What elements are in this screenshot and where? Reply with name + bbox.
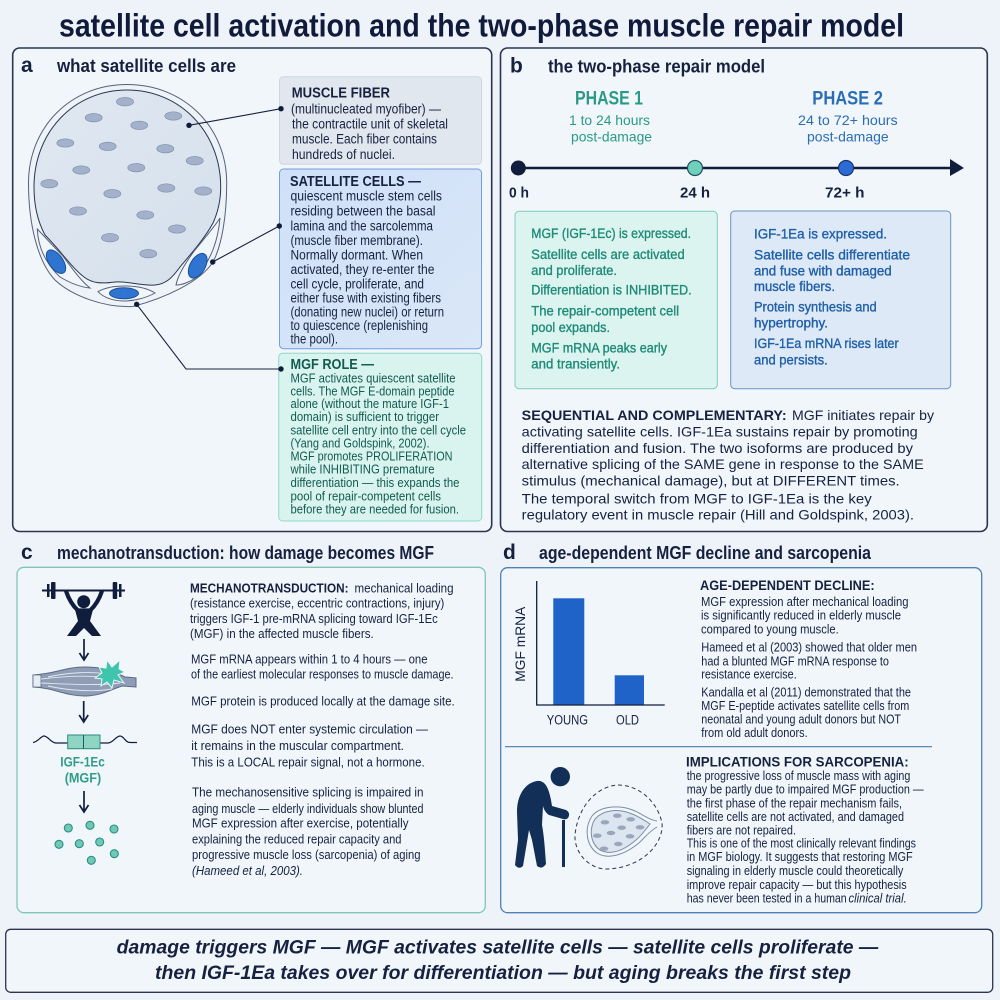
age-dependent decline text: MGF E-peptide activates satellite cells from (701, 698, 909, 713)
age-dependent decline text (700, 577, 917, 740)
callout: satellite cells: quiescent muscle stem cells (290, 189, 442, 204)
callout: muscle fiber: MUSCLE FIBER (292, 85, 390, 101)
callout: MGF role: differentiation — this expands the (290, 475, 460, 490)
sequential and complementary text: regulatory event in muscle repair (Hill and Goldspink, 2003). (522, 507, 914, 522)
callout: MGF role: MGF promotes PROLIFERATION (290, 449, 452, 464)
mechanotransduction text: This is a LOCAL repair signal, not a hormone. (191, 754, 425, 769)
implications for sarcopenia text: This is one of the most clinically relevant findings (687, 836, 916, 851)
phase 2 box: Satellite cells differentiate (754, 247, 910, 262)
age-dependent decline text: MGF expression after mechanical loading (701, 594, 908, 609)
mechanotransduction text: aging muscle — elderly individuals show blunted (192, 801, 424, 816)
phase 2 label: post-damage (807, 129, 889, 145)
callout: satellite cells: (donating new nuclei) or return (290, 304, 444, 319)
phase 1 box: Satellite cells are activated (531, 247, 685, 262)
implications for sarcopenia text: the first phase of the repair mechanism fails, (687, 795, 902, 810)
mechanotransduction text: MGF protein is produced locally at the damage site. (191, 694, 455, 709)
panel d heading: age-dependent MGF decline and sarcopenia (539, 543, 872, 563)
sequential and complementary text (522, 408, 934, 522)
phase 2 box: IGF-1Ea is expressed. (754, 226, 887, 241)
panel b heading: the two-phase repair model (548, 56, 765, 76)
phase 1 box: and proliferate. (531, 263, 617, 278)
nuclei (41, 98, 212, 258)
phase 2 box: and fuse with damaged (754, 263, 892, 278)
muscle fiber cross-section diagram (28, 84, 227, 307)
mechanotransduction text: MGF mRNA appears within 1 to 4 hours — one (191, 651, 428, 666)
callout: satellite cells: activated, they re-enter the (290, 262, 434, 277)
panel: c, mechanotransduction (17, 567, 485, 913)
timeline: 0 h (509, 184, 529, 201)
phase 2 box: Protein synthesis and (754, 299, 877, 314)
implications for sarcopenia text: the progressive loss of muscle mass with aging (687, 768, 910, 783)
arrow (80, 791, 88, 812)
phase 1 label: PHASE 1 (575, 89, 643, 110)
callout: MGF role: pool of repair-competent cells (290, 488, 441, 503)
icon: weightlifter (42, 582, 125, 636)
phase 1 label: 1 to 24 hours (569, 112, 650, 128)
mechanotransduction text: MGF does NOT enter systemic circulation — (191, 721, 428, 736)
age-dependent decline text: compared to young muscle. (701, 622, 839, 637)
callout: satellite cells: SATELLITE CELLS — (290, 174, 421, 190)
callout: muscle fiber: the contractile unit of skeletal (292, 116, 448, 131)
callout: MGF role (279, 353, 482, 521)
mechanotransduction text: progressive muscle loss (sarcopenia) of aging (192, 847, 420, 862)
callout: MGF role: before they are needed for fusion. (290, 502, 459, 517)
bar chart: MGF mRNA young vs old: OLD (616, 712, 639, 727)
callout: satellite cells: (muscle fiber membrane). (290, 233, 423, 248)
phase 1 label (569, 89, 652, 145)
callout: muscle fiber (280, 77, 482, 164)
icon: muscle fiber in dashed circle (575, 785, 662, 869)
age-dependent decline text: resistance exercise. (701, 667, 797, 682)
bar chart: MGF mRNA young vs old (513, 581, 665, 727)
bottom summary banner: damage triggers MGF — MGF activates satellite cells — satellite cells proliferate — (117, 937, 879, 958)
timeline: 72+ h (825, 184, 864, 201)
age-dependent decline text: AGE-DEPENDENT DECLINE: (700, 577, 875, 593)
sequential and complementary text: differentiation and fusion. The two isoforms are produced by (522, 441, 913, 456)
phase 1 box: and transiently. (531, 356, 620, 371)
icon: elderly person with cane (515, 767, 570, 868)
implications for sarcopenia text: fibers are not repaired. (687, 822, 796, 837)
icon: MGF peptide dots (55, 821, 118, 864)
phase 1 box: MGF mRNA peaks early (531, 340, 667, 355)
arrow (80, 639, 88, 660)
phase 2 box: hypertrophy. (754, 315, 828, 330)
phase 2 label (798, 89, 898, 145)
age-dependent decline text: is significantly reduced in elderly muscle (701, 608, 901, 623)
implications for sarcopenia text: IMPLICATIONS FOR SARCOPENIA: (686, 753, 909, 769)
implications for sarcopenia text: clinical trial. (848, 890, 907, 905)
mechanotransduction text: MGF expression after exercise, potentially (192, 816, 409, 831)
callout: satellite cells: either fuse with existing fibers (290, 291, 441, 306)
callout: muscle fiber: (multinucleated myofiber) — (291, 101, 441, 116)
callout: satellite cells: residing between the basal (290, 204, 436, 219)
phase 1 box: MGF (IGF-1Ec) is expressed. (531, 226, 691, 241)
sequential and complementary text: alternative splicing of the SAME gene in response to the SAME (522, 457, 924, 472)
implications for sarcopenia text: has never been tested in a human (687, 890, 847, 905)
mechanotransduction text: (MGF) in the affected muscle fibers. (190, 626, 374, 641)
sequential and complementary text: stimulus (mechanical damage), but at DIFFERENT times. (522, 474, 900, 489)
panel c letter: c (21, 541, 33, 564)
mechanotransduction text: (Hameed et al, 2003). (192, 863, 303, 878)
panel a letter: a (21, 54, 33, 77)
sequential and complementary text: MGF initiates repair by (792, 408, 934, 423)
age-dependent decline text: had a blunted MGF mRNA response to (701, 653, 889, 668)
bottom summary banner: then IGF-1Ea takes over for differentiation — but aging breaks the first step (155, 963, 851, 984)
mechanotransduction text: explaining the reduced repair capacity and (192, 831, 402, 846)
sequential and complementary text: SEQUENTIAL AND COMPLEMENTARY: (522, 408, 787, 423)
sequential and complementary text: activating satellite cells. IGF-1Ea sustains repair by promoting (522, 425, 918, 440)
panel c heading: mechanotransduction: how damage becomes MGF (57, 543, 434, 563)
callout: MGF role: while INHIBITING premature (290, 462, 434, 477)
mechanotransduction text: (resistance exercise, eccentric contractions, injury) (190, 596, 444, 611)
IGF-1Ec label (60, 754, 105, 785)
mechanotransduction text: it remains in the muscular compartment. (191, 738, 404, 753)
mechanotransduction text: triggers IGF-1 pre-mRNA splicing toward IGF-1Ec (190, 611, 438, 626)
phase 2 box: IGF-1Ea mRNA rises later (754, 336, 899, 351)
callout: satellite cells: lamina and the sarcolemma (290, 218, 433, 233)
mechanotransduction text: The mechanosensitive splicing is impaired in (192, 785, 424, 800)
implications for sarcopenia text: improve repair capacity — but this hypothesis (687, 877, 907, 892)
phase 2 box: and persists. (754, 352, 828, 367)
panel b letter: b (510, 54, 523, 78)
mechanotransduction text (190, 580, 455, 878)
panel d letter: d (503, 541, 516, 564)
age-dependent decline text: Hameed et al (2003) showed that older men (701, 640, 917, 655)
mechanotransduction text: MECHANOTRANSDUCTION: (190, 580, 348, 595)
satellite cell niches (37, 218, 220, 301)
age-dependent decline text: from old adult donors. (701, 725, 808, 740)
callout: satellite cells (280, 169, 482, 349)
satellite cells (43, 247, 211, 299)
phase 1 label: post-damage (571, 129, 652, 145)
phase 2 label: PHASE 2 (812, 89, 883, 110)
sequential and complementary text: The temporal switch from MGF to IGF-1Ea is the key (522, 492, 872, 507)
implications for sarcopenia text: in MGF biology. It suggests that restoring MGF (687, 849, 913, 864)
mechanotransduction text: of the earliest molecular responses to muscle damage. (191, 666, 454, 681)
panel: d, age-dependent decline (501, 568, 982, 913)
leader lines (134, 106, 284, 372)
panel: b, the two-phase repair model (500, 48, 987, 532)
bottom summary banner (6, 929, 993, 992)
callout: muscle fiber: muscle. Each fiber contains (292, 132, 437, 147)
implications for sarcopenia text: satellite cells are not activated, and damaged (687, 809, 904, 824)
callout: satellite cells: cell cycle, proliferate, and (290, 277, 424, 292)
callout: satellite cells: the pool). (290, 332, 338, 347)
implications for sarcopenia text (686, 753, 924, 905)
callout: MGF role: (Yang and Goldspink, 2002). (290, 435, 430, 450)
callout: muscle fiber: hundreds of nuclei. (292, 147, 395, 162)
age-dependent decline text: neonatal and young adult donors but NOT (701, 712, 901, 727)
phase 1 box: Differentiation is INHIBITED. (531, 283, 692, 298)
phase 2 box (731, 211, 951, 389)
age-dependent decline text: Kandalla et al (2011) demonstrated that the (701, 684, 911, 699)
icon: damaged muscle (33, 660, 136, 696)
timeline (509, 159, 964, 201)
callout: satellite cells: Normally dormant. When (290, 248, 423, 263)
IGF-1Ec label: (MGF) (65, 769, 101, 785)
arrow (79, 701, 88, 722)
callout: satellite cells: to quiescence (replenishing (290, 318, 428, 333)
phase 2 box: muscle fibers. (754, 279, 835, 294)
timeline: 24 h (680, 184, 710, 201)
icon: IGF-1Ec transcript (33, 735, 137, 749)
callout: MGF role: MGF activates quiescent satellite (290, 370, 456, 385)
implications for sarcopenia text: may be partly due to impaired MGF production — (687, 782, 924, 797)
bar chart: MGF mRNA young vs old: MGF mRNA (513, 607, 528, 682)
callout: MGF role: MGF ROLE — (290, 357, 374, 373)
IGF-1Ec label: IGF-1Ec (60, 754, 105, 770)
phase 1 box: pool expands. (531, 320, 610, 335)
callout: MGF role: alone (without the mature IGF-1 (290, 396, 449, 411)
phase 1 box (515, 211, 717, 389)
callout: MGF role: satellite cell entry into the cell cycle (290, 422, 466, 437)
panel: a, what satellite cells are (13, 48, 492, 532)
callout: MGF role: cells. The MGF E-domain peptide (290, 383, 454, 398)
panel a heading: what satellite cells are (56, 56, 236, 76)
mechanotransduction text: mechanical loading (354, 580, 454, 595)
phase 1 box: The repair-competent cell (531, 304, 679, 319)
bar chart: MGF mRNA young vs old: YOUNG (547, 712, 588, 727)
implications for sarcopenia text: signaling in elderly muscle could theoretically (687, 863, 904, 878)
callout: MGF role: domain) is sufficient to trigger (290, 409, 440, 424)
title: satellite cell activation and the two-phase muscle repair model (59, 8, 904, 44)
phase 2 label: 24 to 72+ hours (798, 112, 898, 128)
